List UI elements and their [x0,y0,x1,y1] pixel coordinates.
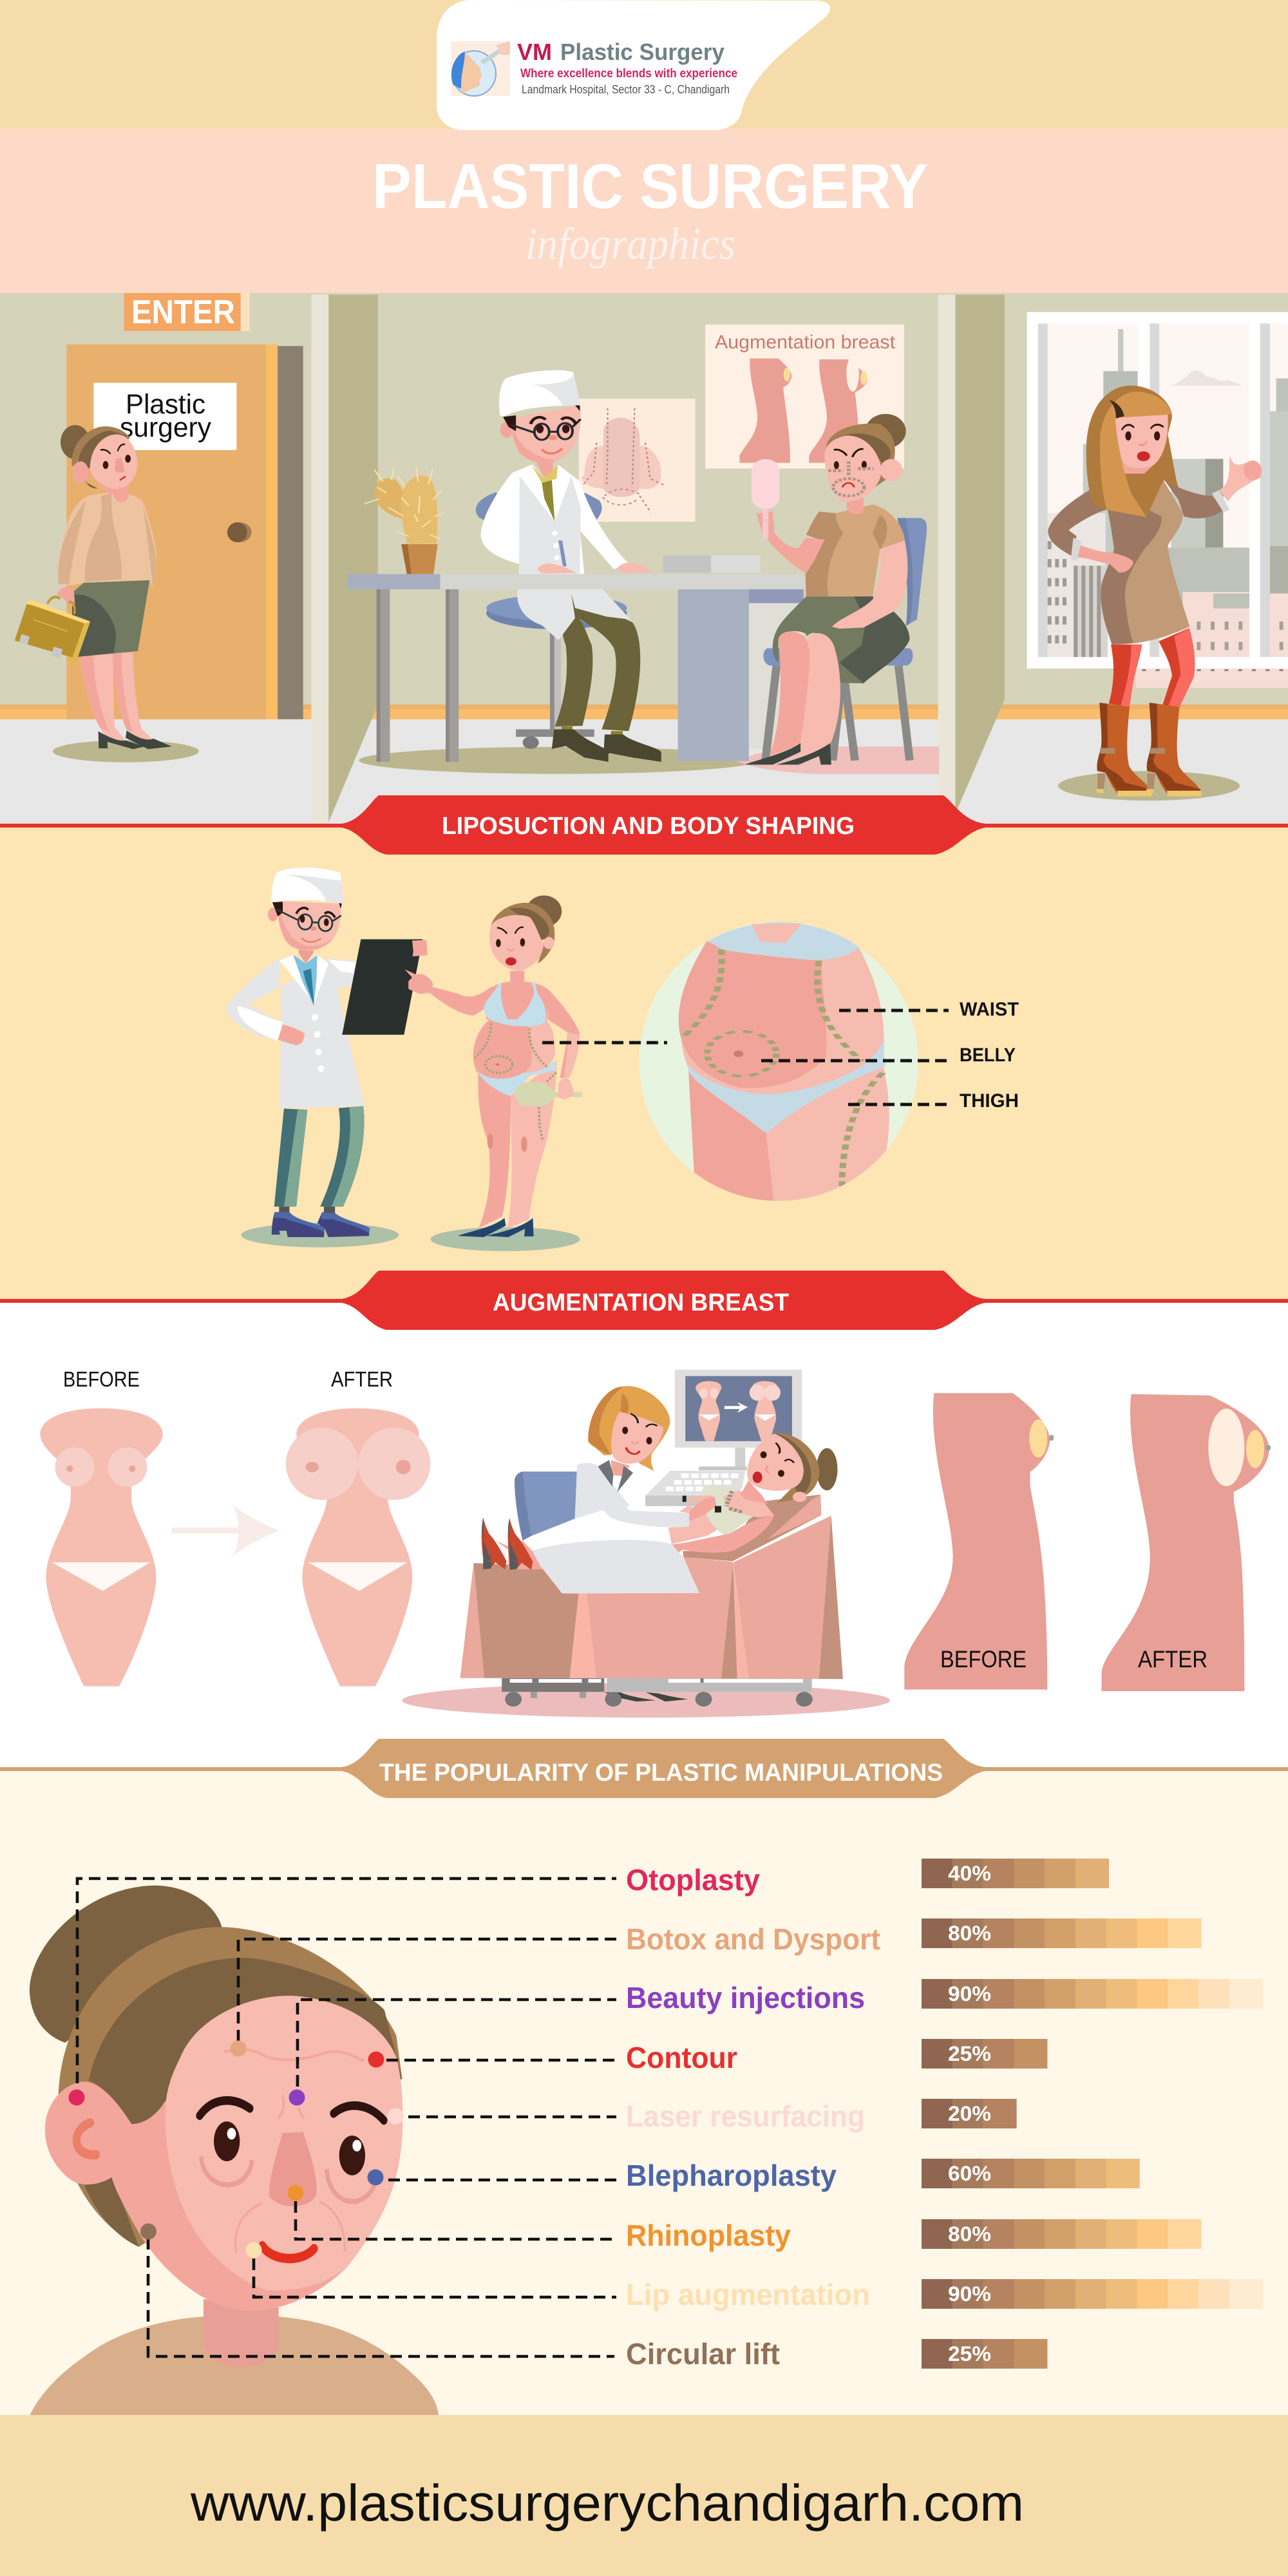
boot right [1146,703,1202,797]
poster: augmentation breast [705,325,904,469]
ultrasound consultation [402,1370,890,1718]
logo badge: Where excellence blends with experience [520,67,737,80]
logo badge: VM [517,39,552,65]
procedure labels: Contour [626,2041,737,2074]
doctor with clipboard [226,867,428,1247]
consulting room [348,325,939,774]
title [372,151,928,269]
panel: clinic scene [0,289,1288,826]
woman patient [404,895,582,1251]
leader lines [77,1879,620,2356]
procedure labels: Blepharoplasty [626,2159,837,2192]
face markers [68,2040,403,2258]
woman with briefcase [15,425,252,762]
panel: liposuction [0,828,1288,1299]
bar 80% rhinoplasty [922,2219,1201,2249]
enter label: ENTER [131,294,235,331]
bar 40%: 40% [948,1862,991,1885]
floor shadows [359,746,939,774]
side body after [1101,1394,1271,1691]
front body before [40,1408,163,1686]
title: PLASTIC SURGERY [372,151,928,222]
banner: popularity: THE POPULARITY OF PLASTIC MANIPULATIONS [379,1759,943,1786]
doctor seated [476,370,661,762]
body part callouts [542,999,1019,1112]
before after labels: AFTER [1138,1646,1208,1672]
door sign text: Plastic [126,389,205,420]
procedure labels [626,1863,880,2371]
before after labels: BEFORE [63,1367,140,1391]
procedure labels: Circular lift [626,2337,780,2371]
bar 80%: 80% [948,1922,991,1945]
face illustration [30,1886,439,2416]
bar 25% [922,2039,1047,2069]
arrow [172,1505,279,1557]
door sign text [121,393,211,442]
procedure labels: Otoplasty [626,1863,760,1897]
procedure labels: Beauty injections [626,1981,865,2014]
body part callouts: BELLY [960,1045,1016,1066]
bar 20% [922,2099,1017,2128]
woman by window [1048,386,1262,800]
bar 90%: 90% [948,1982,991,2005]
bar 25%: 25% [948,2042,991,2065]
procedure labels: Rhinoplasty [626,2219,791,2252]
footer [0,2415,1288,2576]
poster: nose [579,399,696,522]
boot left [1097,703,1151,797]
bar 40% [922,1859,1109,1888]
poster label: Augmentation breast [715,332,896,353]
enter door [66,345,303,719]
window with skyline [1027,312,1288,688]
plant [365,467,444,574]
front body after [286,1408,430,1686]
keyboard [645,1471,745,1506]
bar 90% lips [922,2279,1263,2309]
before after labels [63,1367,1208,1672]
panel: popularity [0,1771,1288,2416]
desk back elements [377,555,804,762]
bar 25% lift [922,2339,1047,2369]
bar chart [922,1859,1263,2369]
banner: popularity [0,1739,1288,1798]
title band [0,129,1288,293]
logo emblem [451,41,510,96]
room walls and door [66,289,1005,824]
side body before [904,1393,1054,1689]
bar 80% [922,1918,1201,1948]
monitor [675,1370,802,1470]
bar 60%: 60% [948,2162,991,2185]
logo badge: Landmark Hospital, Sector 33 - C, Chandigarh [522,83,730,96]
header band [0,0,1288,129]
logo badge: Plastic Surgery [560,39,724,65]
footer: www.plasticsurgerychandigarh.com [190,2474,1024,2532]
banner: liposuction [0,795,1288,855]
title: infographics [526,220,735,269]
before after labels: AFTER [331,1367,393,1391]
procedure labels: Laser resurfacing [626,2099,865,2133]
banner: liposuction: LIPOSUCTION AND BODY SHAPING [442,813,855,840]
procedure labels: Botox and Dysport [626,1922,880,1956]
bar 90% [922,1979,1263,2009]
bar 90% lips: 90% [948,2282,991,2306]
drape table [460,1495,843,1679]
logo badge [437,0,830,130]
bar 25% lift: 25% [948,2342,991,2365]
banner: augmentation [0,1271,1288,1330]
desk top [348,574,819,589]
body part callouts: THIGH [960,1090,1019,1112]
bar 20%: 20% [948,2102,991,2125]
before after labels: BEFORE [940,1646,1027,1672]
bar 80% rhinoplasty: 80% [948,2222,991,2246]
door sign text: surgery [120,412,211,443]
procedure labels: Lip augmentation [626,2278,870,2311]
chair [515,1472,579,1540]
patient with mirror [745,414,927,764]
body zoom circle [639,922,918,1201]
bar 60% [922,2159,1140,2188]
partition walls [311,295,1005,824]
body part callouts: WAIST [960,999,1019,1020]
patient reclined [482,1434,838,1569]
panel: augmentation [0,1303,1288,1767]
banner: augmentation: AUGMENTATION BREAST [493,1289,789,1316]
doctor and patient standing [226,867,582,1251]
doctor consulting [523,1386,721,1593]
